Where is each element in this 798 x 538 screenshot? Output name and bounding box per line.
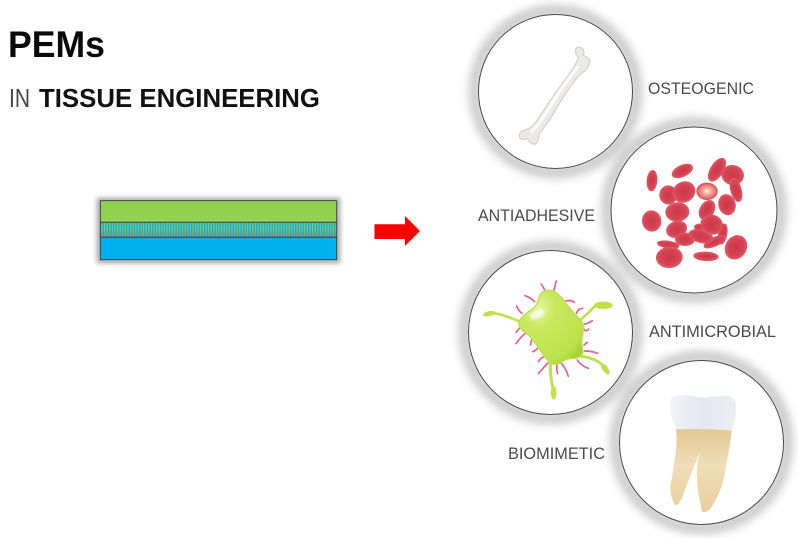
icon: microbial cell (483, 281, 613, 399)
title: PEMs (8, 24, 105, 65)
cell arms (483, 302, 613, 399)
circle: red blood cells (611, 127, 777, 293)
arrow (374, 216, 420, 246)
subtitle: TISSUE ENGINEERING (39, 83, 320, 113)
icon: tooth (670, 395, 736, 512)
label: osteogenic: OSTEOGENIC (648, 79, 754, 98)
subtitle: IN (9, 83, 30, 113)
label: antiadhesive: ANTIADHESIVE (478, 206, 595, 225)
membrane layer stack (96, 198, 340, 264)
circle: tooth (620, 360, 784, 524)
tooth root (670, 428, 732, 512)
layer: striped interface (100, 222, 337, 237)
circle: bone (478, 14, 632, 168)
highlight (528, 307, 546, 321)
label: antimicrobial: ANTIMICROBIAL (649, 322, 776, 341)
layer: green (100, 201, 337, 222)
circle: microbial cell (468, 250, 632, 414)
layer: blue (100, 237, 337, 260)
label: biomimetic: BIOMIMETIC (508, 444, 605, 463)
icon: bone (519, 47, 590, 144)
cell body (519, 290, 583, 364)
icon: red blood cells (641, 156, 751, 268)
pink filaments (516, 281, 598, 376)
circle shadows (464, 10, 788, 528)
tooth crown (670, 395, 736, 431)
